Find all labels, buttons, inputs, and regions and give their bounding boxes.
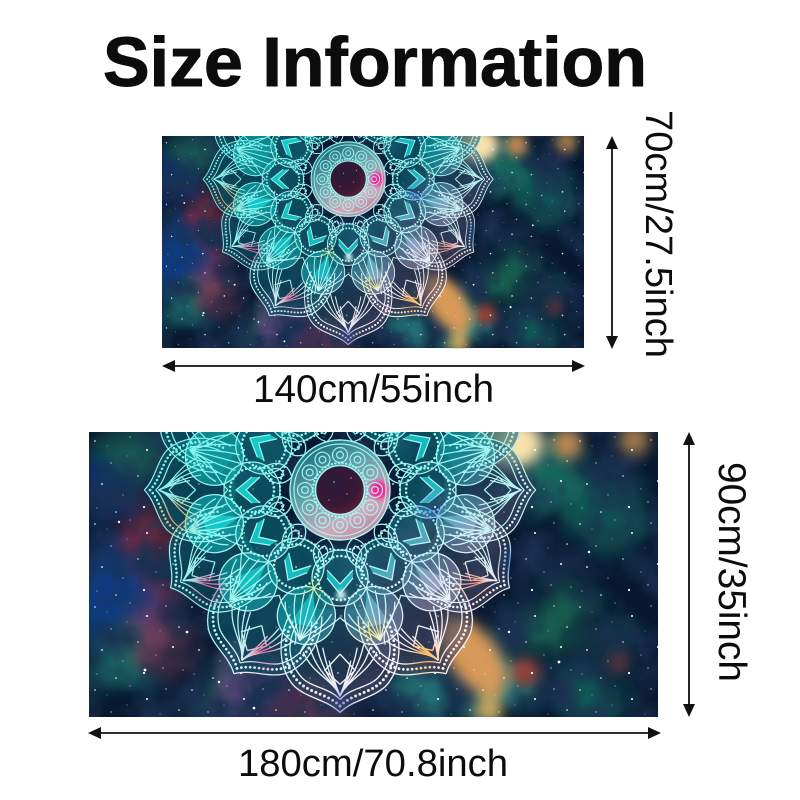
arrow: small tapestry height bbox=[606, 136, 618, 349]
label: large tapestry width: 180cm/70.8inch bbox=[238, 742, 508, 785]
title: Size Information bbox=[103, 23, 647, 101]
arrow: small tapestry width bbox=[162, 360, 585, 372]
arrow: large tapestry width bbox=[88, 727, 661, 739]
arrow: large tapestry height bbox=[683, 432, 695, 717]
label: large tapestry height: 90cm/35inch bbox=[710, 462, 753, 682]
image: small tapestry with mandala on galaxy background bbox=[143, 26, 584, 361]
label: small tapestry width: 140cm/55inch bbox=[253, 368, 494, 411]
label: small tapestry height: 70cm/27.5inch bbox=[637, 110, 679, 358]
image: large tapestry with mandala on galaxy background bbox=[64, 284, 658, 734]
